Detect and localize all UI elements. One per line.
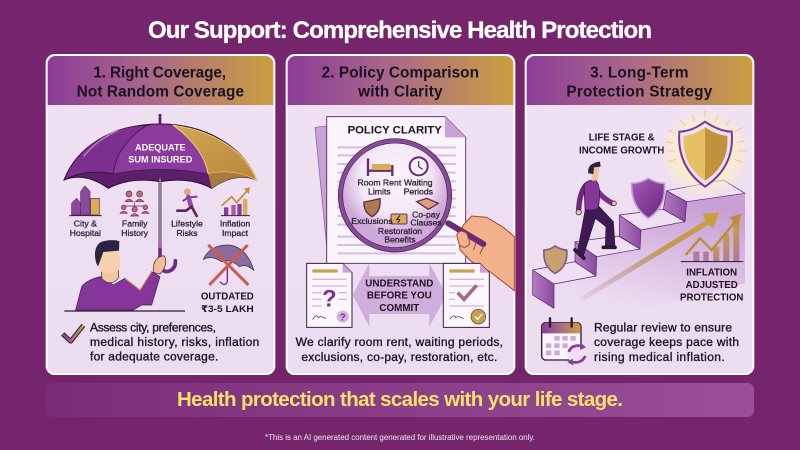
label: city and hospital: City & <box>74 219 97 229</box>
icon: city <box>69 186 102 216</box>
icon: glow rays <box>660 108 750 198</box>
icon: climbing man <box>575 162 616 258</box>
label: restoration benefits: Benefits <box>384 234 416 244</box>
document <box>315 117 466 263</box>
label: life stage: INCOME GROWTH <box>579 145 664 156</box>
icon: medium shield <box>632 178 665 218</box>
panel: long-term strategy <box>526 55 753 374</box>
document: POLICY CLARITY <box>348 124 442 136</box>
label: family history: Family <box>122 219 148 229</box>
heading: Protection Strategy <box>566 83 713 100</box>
icon: small shield <box>544 246 567 273</box>
document: checked <box>443 263 489 327</box>
banner <box>46 383 754 417</box>
body text <box>296 335 503 364</box>
arrow text <box>365 278 433 314</box>
header band <box>288 56 513 105</box>
icon: umbrella <box>64 114 257 271</box>
body text: exclusions, co-pay, restoration, etc. <box>301 350 497 364</box>
label: co-pay clauses: Co-pay <box>412 209 441 219</box>
heading: 2. Policy Comparison <box>322 65 479 82</box>
arrow: rising <box>578 212 719 300</box>
double arrow <box>353 263 447 327</box>
check mark fill <box>63 325 83 341</box>
footnote: *This is an AI generated content generated for illustrative representation only. <box>265 433 535 442</box>
label: waiting periods: Periods <box>404 186 434 196</box>
staircase <box>533 180 745 308</box>
icon: battery <box>391 214 407 224</box>
body text: for adequate coverage. <box>90 349 218 363</box>
icon: family tree <box>120 191 149 216</box>
label: lifestyle risks: Lifestyle <box>171 219 203 229</box>
label: city and hospital: Hospital <box>70 228 101 238</box>
body text: We clarify room rent, waiting periods, <box>296 335 503 349</box>
icon: thumb and finger lines <box>457 231 483 254</box>
label: inflation adjusted protection: PROTECTION <box>680 292 743 303</box>
heading <box>77 65 244 100</box>
label: inflation impact: Inflation <box>220 219 250 229</box>
label: restoration benefits <box>378 226 422 244</box>
icon: hand <box>458 216 514 291</box>
card <box>47 55 274 374</box>
label: co-pay clauses: Clauses <box>410 217 442 227</box>
document: question: ? <box>322 286 337 313</box>
body text: Regular review to ensure <box>594 321 732 335</box>
arrow text: UNDERSTAND <box>365 278 433 289</box>
heading: 3. Long-Term <box>590 65 688 82</box>
body text: coverage keeps pace with <box>594 335 739 349</box>
label: waiting periods <box>404 178 434 196</box>
heading: Not Random Coverage <box>77 83 244 100</box>
heading: 1. Right Coverage, <box>93 65 226 82</box>
label: inflation impact: Impact <box>222 228 249 238</box>
label: inflation adjusted protection: INFLATION <box>686 268 737 279</box>
body text <box>90 321 259 363</box>
icon: calendar <box>542 318 586 365</box>
label: restoration benefits: Restoration <box>378 226 422 236</box>
arrow text: BEFORE YOU <box>367 291 432 302</box>
icon: handshake <box>417 198 438 209</box>
label: room rent limits: Limits <box>368 186 391 196</box>
label: outdated: OUTDATED <box>201 292 254 303</box>
header band <box>527 56 752 105</box>
icon: magnifier handle <box>448 223 483 244</box>
icon: person holding umbrella <box>64 240 185 311</box>
label: outdated: ₹3-5 LAKH <box>201 304 254 314</box>
heading: with Clarity <box>357 83 443 100</box>
document: question <box>307 263 352 327</box>
card <box>287 55 514 374</box>
body text: rising medical inflation. <box>594 350 725 364</box>
icon: magnifying glass <box>338 139 452 252</box>
panel: policy comparison <box>287 55 514 374</box>
icon: bed <box>368 158 392 176</box>
card <box>526 55 753 374</box>
label: exclusions: Exclusions <box>351 216 393 226</box>
label: life stage: LIFE STAGE & <box>589 133 655 144</box>
label: family history <box>121 219 149 238</box>
document: question: ? <box>340 312 346 323</box>
icon: clock <box>410 157 428 175</box>
heading <box>322 65 479 100</box>
label: inflation adjusted protection <box>680 268 743 303</box>
icon: check mark <box>63 325 83 341</box>
body text <box>594 321 739 364</box>
icon: umbrella: SUM INSURED <box>128 155 193 165</box>
title: Our Support: Comprehensive Health Protection <box>148 17 652 44</box>
label: city and hospital <box>70 219 101 238</box>
icon: large gold shield <box>679 122 732 187</box>
icon: umbrella: ADEQUATE <box>135 142 186 152</box>
body text: medical history, risks, inflation <box>90 335 259 349</box>
label: inflation adjusted protection: ADJUSTED <box>686 280 738 291</box>
icon: inflation chart <box>221 187 250 216</box>
label: lifestyle risks: Risks <box>176 228 198 238</box>
label: inflation impact <box>220 219 250 238</box>
label: waiting periods: Waiting <box>404 178 433 188</box>
icon: shield <box>364 199 380 217</box>
label: life stage <box>579 133 664 156</box>
label: outdated <box>201 292 254 314</box>
arrow text: COMMIT <box>379 303 419 314</box>
icon: outdated umbrella crossed out <box>203 245 254 285</box>
label: lifestyle risks <box>171 219 203 238</box>
icon: runner <box>177 188 197 216</box>
label: family history: History <box>121 228 149 238</box>
body text: Assess city, preferences, <box>90 321 216 335</box>
chart: inflation <box>681 213 743 262</box>
header band <box>48 56 273 105</box>
heading <box>566 65 713 100</box>
label: co-pay clauses <box>410 209 442 227</box>
label: room rent limits <box>357 178 402 196</box>
tagline: Health protection that scales with your life stage. <box>177 388 623 411</box>
label: room rent limits: Room Rent <box>357 178 402 188</box>
panel: right coverage <box>47 55 274 374</box>
